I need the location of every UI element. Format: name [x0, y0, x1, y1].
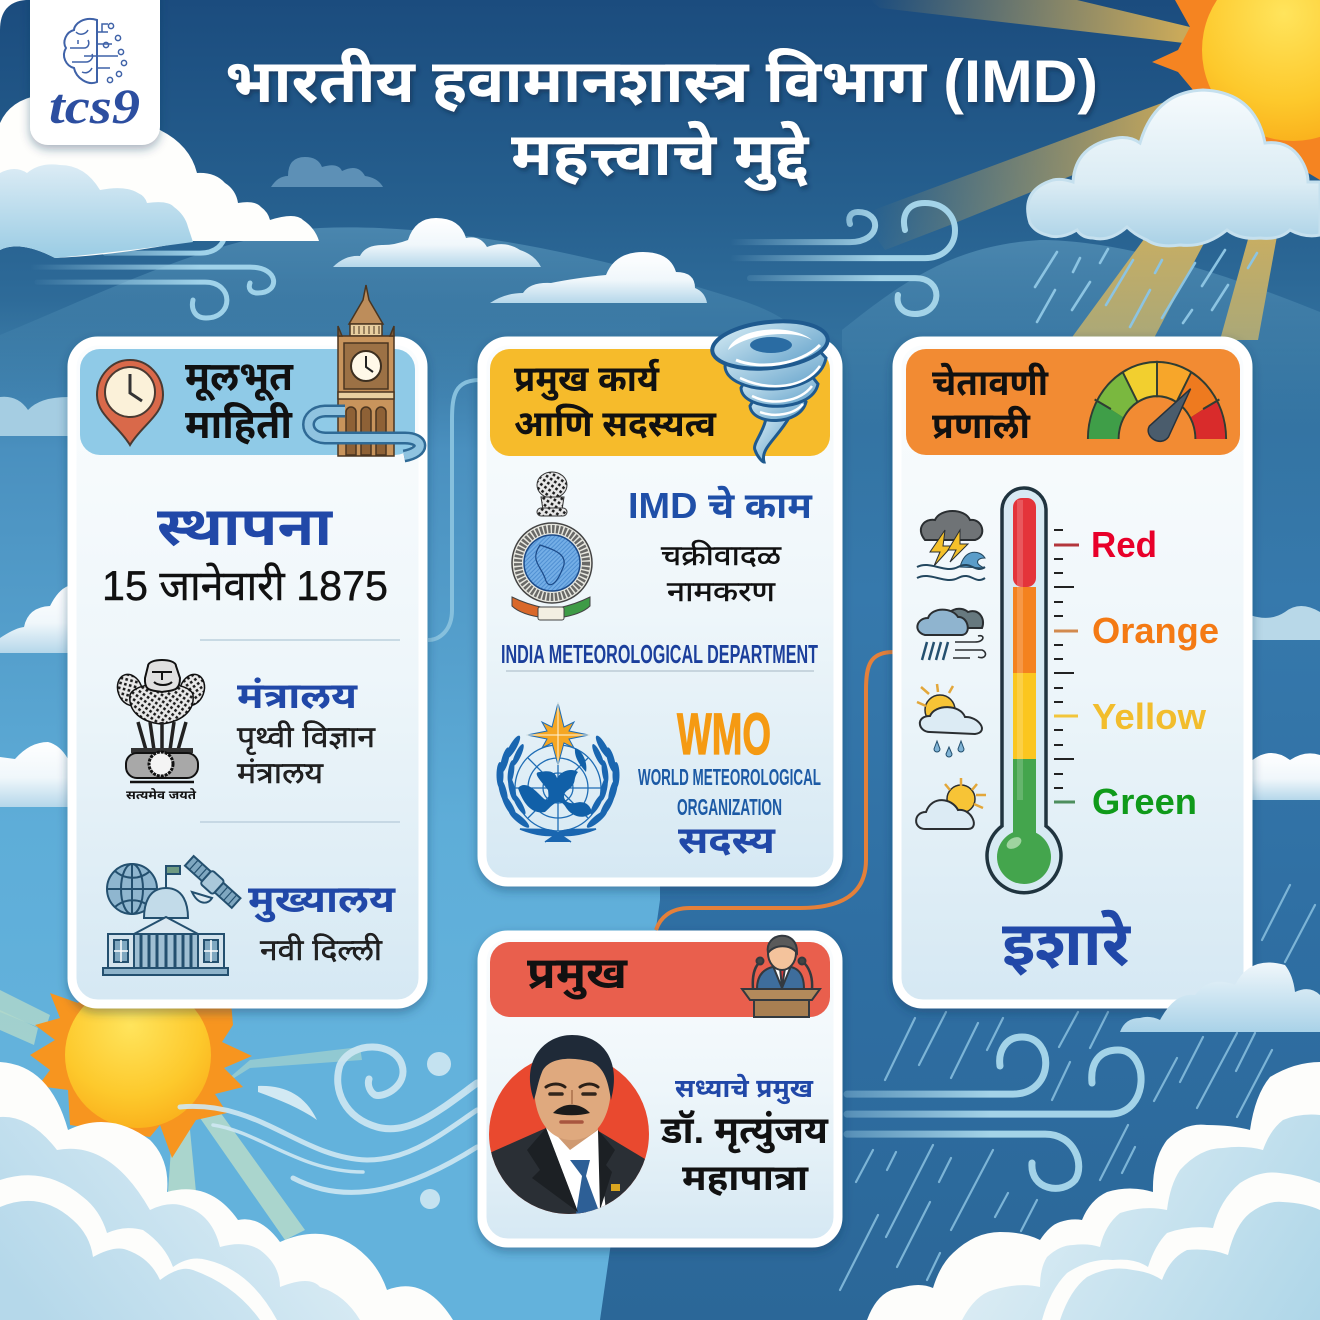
cloud: top left — [0, 95, 319, 258]
wind swirls upper left — [32, 217, 274, 318]
headquarters text: नवी दिल्ली — [260, 933, 383, 967]
panel: chief — [482, 935, 838, 1243]
heading — [514, 358, 717, 444]
IMD work text: चक्रीवादळ — [661, 539, 782, 571]
department name: INDIA METEOROLOGICAL DEPARTMENT — [501, 639, 818, 669]
rain upper right — [1035, 249, 1257, 327]
thermometer — [987, 488, 1061, 893]
title — [225, 48, 1098, 192]
icon: gauge — [1095, 361, 1219, 441]
icon: national emblem — [113, 660, 209, 802]
warning labels: Orange — [1092, 610, 1219, 651]
heading — [932, 361, 1049, 446]
warning labels: Yellow — [1092, 696, 1207, 737]
WMO text: ORGANIZATION — [677, 794, 782, 820]
logo text: tcs9 — [49, 78, 140, 134]
warning labels — [1091, 524, 1219, 822]
heading: चेतावणी — [932, 361, 1049, 403]
icon: rain and wind — [917, 609, 985, 660]
chief name: महापात्रा — [682, 1157, 809, 1198]
warning labels: Red — [1091, 524, 1157, 565]
title: भारतीय हवामानशास्त्र विभाग (IMD) — [225, 48, 1098, 115]
header band — [80, 349, 415, 455]
icon: sun and cloud — [916, 778, 986, 829]
icon: tornado — [710, 316, 830, 462]
headquarters text: मुख्यालय — [248, 879, 396, 923]
headquarters text — [248, 879, 396, 967]
icon: IMD emblem — [512, 472, 592, 620]
heading: प्रमुख कार्य — [514, 358, 660, 401]
WMO text — [638, 702, 821, 862]
ministry text — [237, 675, 376, 790]
cloud: small dim — [271, 157, 383, 187]
clouds: left edge — [0, 397, 68, 436]
IMD work text: नामकरण — [667, 576, 776, 607]
title: महत्त्वाचे मुद्दे — [511, 121, 810, 192]
clouds lower left — [0, 1062, 453, 1320]
founding date — [102, 497, 388, 609]
chief name — [660, 1073, 829, 1198]
wind swirls upper right — [730, 203, 955, 314]
IMD work text — [628, 484, 813, 607]
icon: national emblem: सत्यमेव जयते — [126, 787, 197, 802]
founding date: स्थापना — [157, 497, 333, 557]
sun bottom left — [0, 982, 362, 1240]
sun top right — [1152, 0, 1320, 180]
WMO text: WMO — [677, 702, 771, 767]
cloud: centre one — [333, 218, 541, 267]
WMO text: सदस्य — [678, 820, 776, 862]
icon: clock tower — [308, 285, 420, 456]
clouds: right edge — [1250, 606, 1320, 640]
icon: clock pin — [97, 360, 163, 445]
icon: storm — [917, 511, 985, 580]
connector: blue — [428, 380, 480, 640]
warning labels: Green — [1092, 781, 1197, 822]
IMD work text: IMD चे काम — [628, 484, 813, 526]
panel: main functions and membership — [482, 316, 838, 882]
icon: brain — [64, 19, 127, 83]
portrait — [489, 1035, 649, 1214]
wind swirls lower left — [180, 1047, 477, 1209]
chief name: डॉ. मृत्युंजय — [660, 1109, 829, 1154]
heading: आणि सदस्यत्व — [514, 403, 717, 444]
clouds lower right — [867, 1062, 1320, 1320]
rain lower right — [840, 885, 1315, 1290]
icon: speaker at podium — [742, 936, 820, 1017]
WMO text: WORLD METEOROLOGICAL — [638, 764, 821, 790]
icon: WMO emblem — [496, 703, 620, 842]
thermometer scale — [1054, 530, 1079, 802]
wind swirls lower right — [847, 1037, 1141, 1188]
founding date: 15 जानेवारी 1875 — [102, 562, 388, 609]
heading — [185, 355, 294, 447]
icon: sun cloud rain — [917, 684, 982, 757]
cloud: top right — [1028, 90, 1320, 246]
clouds upper — [0, 90, 1320, 807]
header band — [490, 349, 830, 456]
header band — [490, 942, 830, 1017]
logo — [30, 0, 160, 145]
ministry text: मंत्रालय — [237, 675, 358, 716]
heading: मूलभूत — [185, 355, 294, 401]
heading: प्रमुख — [527, 949, 629, 1000]
chief name: सध्याचे प्रमुख — [675, 1073, 814, 1104]
header band — [906, 349, 1240, 455]
connector: orange — [656, 652, 894, 930]
sun rays top right — [860, 0, 1277, 340]
heading: प्रणाली — [932, 405, 1031, 446]
cloud: over warning panel corner — [1120, 962, 1320, 1032]
warnings heading: इशारे — [1002, 908, 1132, 979]
panel: basic information — [72, 285, 423, 1004]
ministry text: पृथ्वी विज्ञान — [237, 720, 376, 756]
cloud: centre two — [490, 252, 707, 303]
heading: माहिती — [185, 402, 293, 447]
panel: warning system — [897, 341, 1248, 1004]
icon: headquarters building with globe and satellite — [103, 855, 242, 975]
ministry text: मंत्रालय — [237, 757, 324, 790]
